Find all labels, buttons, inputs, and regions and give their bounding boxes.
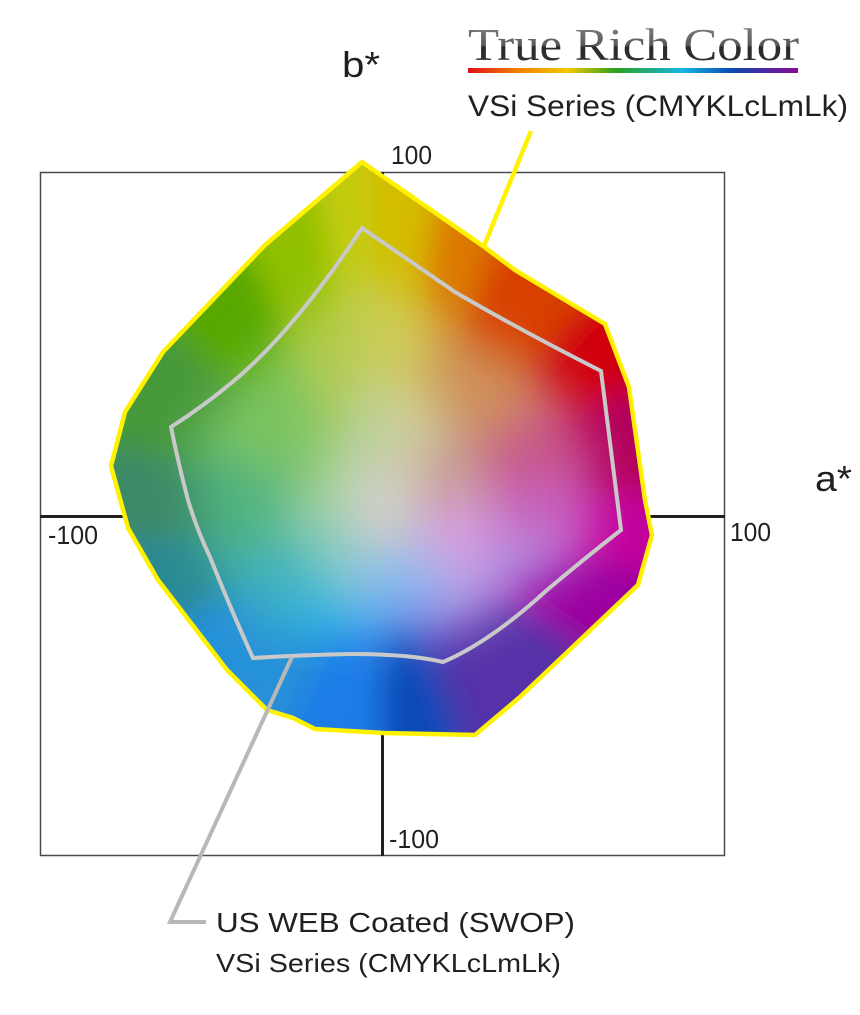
b* axis bbox=[381, 172, 384, 856]
leader line: SWOP bbox=[170, 657, 292, 922]
label: VSi Series bottom: VSi Series (CMYKLcLmLk) bbox=[216, 948, 561, 978]
label: VSi Series top: VSi Series (CMYKLcLmLk) bbox=[468, 90, 848, 123]
neutral centre bbox=[352, 457, 412, 553]
pale inner tints bbox=[280, 370, 500, 610]
chart frame bbox=[40, 172, 724, 856]
axis label: b*: b* bbox=[342, 44, 380, 85]
SWOP inner gamut outline bbox=[171, 228, 621, 662]
logo: True Rich Color: True Rich Color bbox=[468, 20, 799, 70]
label: US WEB Coated: US WEB Coated (SWOP) bbox=[216, 907, 575, 938]
leader line: VSi Series bbox=[484, 131, 531, 246]
tick label: b 100: 100 bbox=[391, 140, 432, 170]
axis label: a*: a* bbox=[815, 458, 852, 499]
tick label: a 100: 100 bbox=[730, 517, 771, 547]
tick label: b -100: -100 bbox=[389, 824, 439, 854]
tick label: a -100: -100 bbox=[48, 520, 98, 550]
a* axis bbox=[40, 515, 725, 518]
colour gamut fill bbox=[113, 164, 650, 733]
VSi Series outer gamut outline bbox=[111, 162, 652, 735]
